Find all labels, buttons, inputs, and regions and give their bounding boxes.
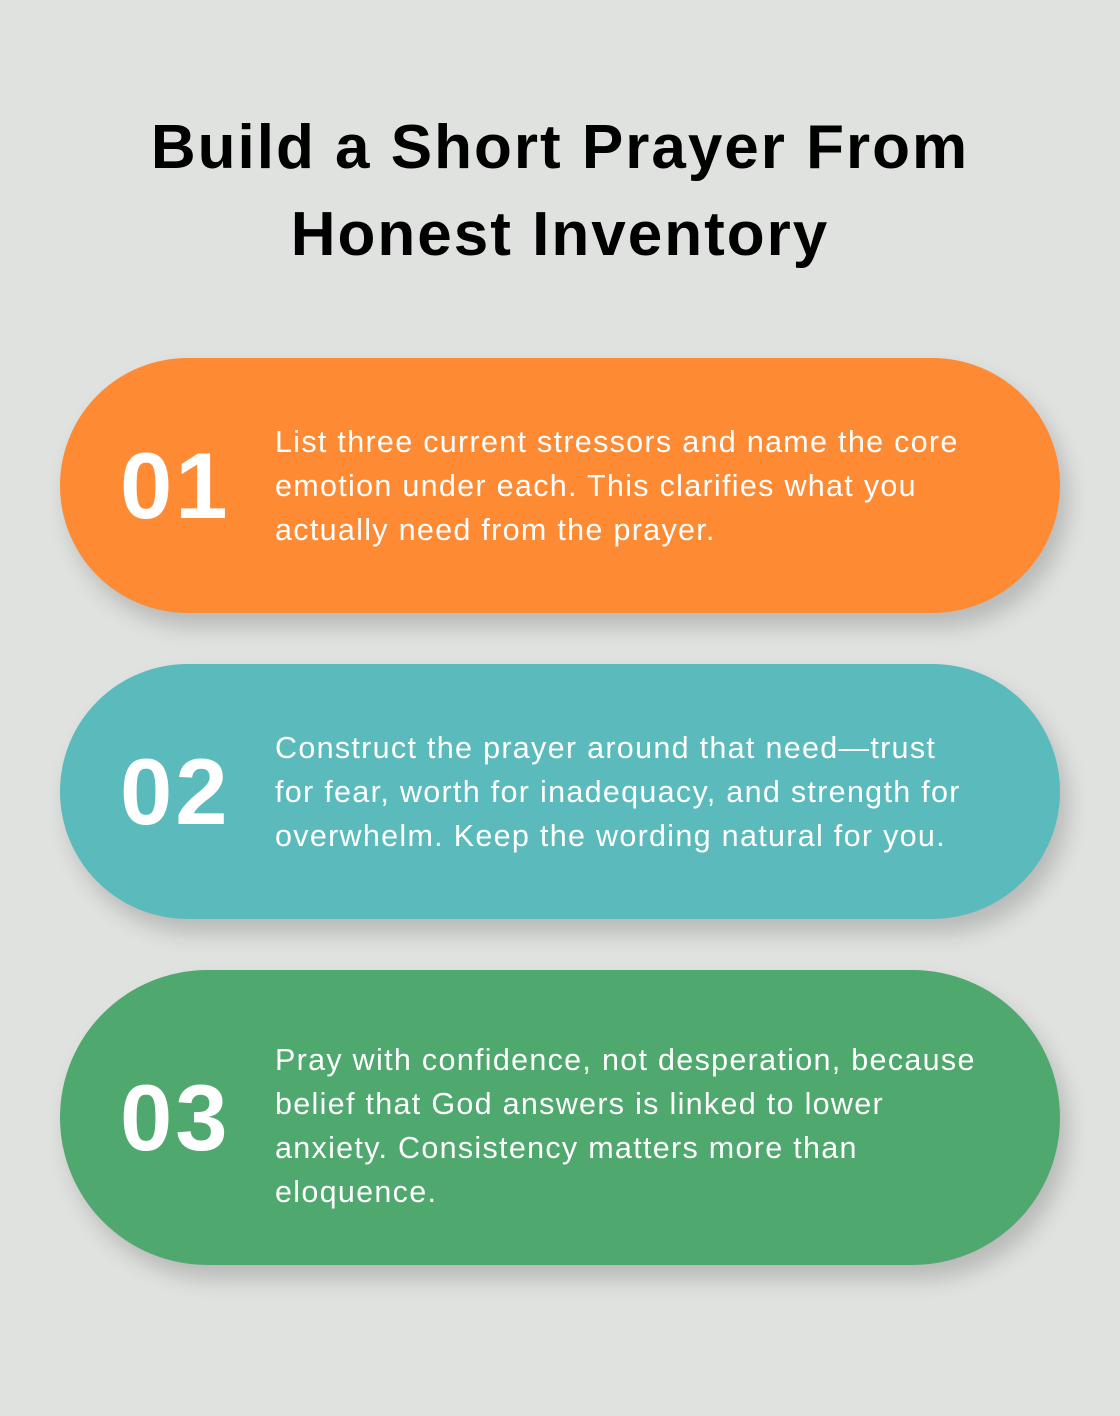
panel: step 01 [60, 358, 1060, 613]
number 02: 02 [120, 739, 231, 844]
number 01: 01 [120, 433, 231, 538]
text step 03: Pray with confidence, not desperation, because [275, 1043, 976, 1077]
text step 02: overwhelm. Keep the wording natural for you. [275, 819, 946, 853]
text step 03 [275, 1043, 976, 1209]
text step 02: for fear, worth for inadequacy, and strength for [275, 775, 961, 809]
panel: step 03 [60, 970, 1060, 1265]
number 03: 03 [120, 1065, 231, 1170]
panel: step 02 [60, 664, 1060, 919]
text step 01: List three current stressors and name the core [275, 425, 959, 459]
title: Honest Inventory [291, 200, 829, 269]
title: Build a Short Prayer From [151, 113, 969, 182]
title [151, 113, 969, 269]
text step 03: anxiety. Consistency matters more than [275, 1131, 858, 1165]
text step 01: actually need from the prayer. [275, 513, 716, 547]
text step 01: emotion under each. This clarifies what you [275, 469, 917, 503]
text step 03: eloquence. [275, 1175, 437, 1209]
text step 03: belief that God answers is linked to lower [275, 1087, 884, 1121]
text step 02: Construct the prayer around that need—trust [275, 731, 936, 765]
text step 01 [275, 425, 959, 547]
text step 02 [275, 731, 961, 853]
